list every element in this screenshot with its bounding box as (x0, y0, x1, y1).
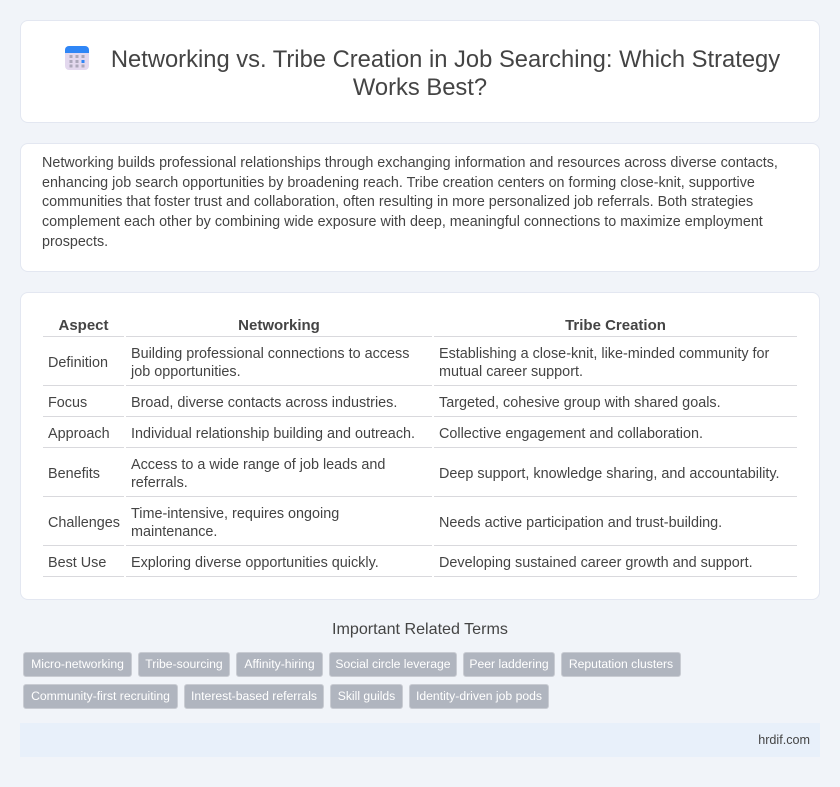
row: challenges: maintenance. (131, 524, 217, 540)
row: definition: Building professional connections to access (131, 346, 409, 362)
row: challenges: Challenges (48, 515, 120, 531)
row: approach: Collective engagement and collaboration. (439, 426, 703, 442)
heading: important related terms: Important Related Terms (332, 620, 508, 638)
table header: Networking (238, 317, 320, 334)
tags: related terms (23, 652, 681, 709)
row: best use: Exploring diverse opportunities quickly. (131, 555, 379, 571)
row: best use: Developing sustained career growth and support. (439, 555, 753, 571)
row: challenges: Time-intensive, requires ongoing (131, 506, 339, 522)
tags: related terms: Social circle leverage (335, 657, 451, 671)
row: focus (48, 395, 721, 411)
row: benefits: referrals. (131, 475, 188, 491)
comparison table (43, 317, 797, 577)
table header: Tribe Creation (565, 317, 666, 334)
tags: related terms: Identity-driven job pods (416, 689, 542, 703)
intro text: prospects. (42, 234, 108, 250)
footer source: hrdif.com (758, 733, 810, 747)
row: benefits (48, 457, 780, 491)
row: approach (48, 426, 703, 442)
tags: related terms: Tribe-sourcing (145, 657, 223, 671)
row: definition: mutual career support. (439, 364, 583, 380)
tags: related terms: Micro-networking (31, 657, 124, 671)
row: best use: Best Use (48, 555, 106, 571)
row: benefits: Deep support, knowledge sharing, and accountability. (439, 466, 780, 482)
tags: related terms: Affinity-hiring (244, 657, 315, 671)
intro text: complement each other by combining wide exposure with deep, meaningful connections to maximize employment (42, 214, 763, 230)
row: definition: Establishing a close-knit, like-minded community for (439, 346, 769, 362)
icon: calendar (65, 46, 89, 70)
row: approach: Individual relationship building and outreach. (131, 426, 415, 442)
panel: introduction (20, 143, 820, 272)
tags: related terms: Peer laddering (469, 657, 549, 671)
panel: comparison table (20, 292, 820, 600)
title (111, 46, 780, 101)
row: focus: Broad, diverse contacts across industries. (131, 395, 397, 411)
intro text: Networking builds professional relationships through exchanging information and resources across diverse contacts, (42, 155, 778, 171)
row: focus: Targeted, cohesive group with shared goals. (439, 395, 721, 411)
row: challenges: Needs active participation and trust-building. (439, 515, 722, 531)
intro text: enhancing job search opportunities by broadening reach. Tribe creation centers on forming close-knit, supportive (42, 175, 755, 191)
row: benefits: Benefits (48, 466, 100, 482)
table header: Aspect (58, 317, 109, 334)
row: definition: Definition (48, 355, 108, 371)
panel: header (20, 20, 820, 123)
row: approach: Approach (48, 426, 110, 442)
tags: related terms: Community-first recruiting (31, 689, 170, 703)
row: benefits: Access to a wide range of job leads and (131, 457, 385, 473)
title: Works Best? (353, 74, 487, 101)
footer (20, 723, 820, 757)
table header (58, 317, 666, 334)
tags: related terms: Skill guilds (338, 689, 395, 703)
title: Networking vs. Tribe Creation in Job Searching: Which Strategy (111, 46, 780, 73)
row: focus: Focus (48, 395, 87, 411)
tags: related terms: Reputation clusters (569, 657, 673, 671)
tags: related terms: Interest-based referrals (191, 689, 317, 703)
row: best use (48, 555, 753, 571)
row: definition: job opportunities. (131, 364, 241, 380)
row: definition (48, 346, 770, 380)
row: challenges (48, 506, 722, 540)
intro text: communities that foster trust and collaboration, often resulting in more personalized job referrals. Both strategies (42, 194, 753, 210)
intro text (42, 155, 778, 250)
